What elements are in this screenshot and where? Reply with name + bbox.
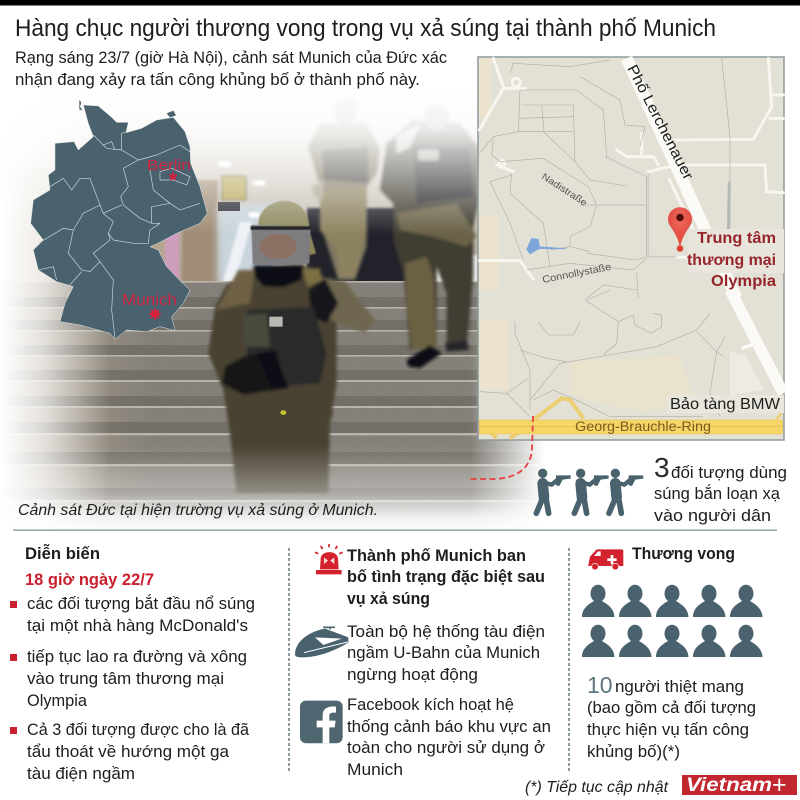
gunmen text: đối tượng dùng — [671, 463, 787, 482]
logo: Vietnam+ — [682, 771, 797, 799]
text: facebook: thống cảnh báo khu vực an — [347, 717, 551, 736]
pillar and corridor — [182, 180, 218, 286]
map lines upper — [479, 58, 783, 298]
icon: siren — [315, 544, 343, 574]
map of Germany — [31, 100, 207, 339]
icon: Berlin star — [168, 171, 178, 181]
text: U-Bahn — [347, 622, 545, 684]
callout: Olympia: Olympia — [711, 273, 776, 290]
text: death toll: thực hiện vụ tấn công — [587, 720, 749, 739]
gunmen text: vào người dân — [654, 506, 771, 525]
map street labels: Phố Lerchenauer — [623, 62, 697, 183]
icon: train — [295, 627, 348, 657]
gunmen text: súng bắn loạn xạ — [654, 484, 781, 503]
bullet one: các đối tượng bắt đầu nổ súng — [27, 594, 255, 613]
panel: state of emergency — [295, 544, 551, 779]
text: facebook: Munich — [347, 760, 403, 779]
icon: ambulance — [588, 549, 623, 570]
panel: street map: Nadistraße — [539, 171, 589, 209]
map landmark: BMW museum — [667, 395, 784, 413]
text: death toll — [587, 672, 756, 761]
heading: casualties: Thương vong — [632, 544, 735, 563]
map blocks — [479, 58, 765, 412]
callout: Olympia — [687, 229, 784, 290]
bullet one — [10, 594, 255, 635]
panel: timeline — [10, 544, 255, 783]
footnote: (*) Tiếp tục cập nhật — [525, 779, 669, 796]
foreground soldier — [208, 201, 375, 493]
icon: map pin — [668, 207, 692, 252]
bullet two: tiếp tục lao ra đường và xông — [27, 647, 247, 666]
label: Berlin: Berlin — [147, 157, 191, 174]
stair texture — [0, 282, 545, 532]
map lines lower — [479, 290, 783, 438]
logo: Vietnam+: + — [772, 771, 787, 799]
panel: street map — [478, 57, 784, 440]
bullet three — [10, 720, 250, 783]
text: death toll: người thiệt mang — [615, 677, 744, 696]
bullet two — [10, 647, 247, 710]
icons: ten victims — [582, 585, 762, 657]
bullet three: tàu điện ngầm — [27, 764, 135, 783]
arrow: red dashed connector — [468, 416, 533, 479]
date: 18 giờ ngày 22/7 — [25, 570, 154, 589]
text: facebook: Facebook kích hoạt hệ — [347, 695, 514, 714]
panel: street map: Georg-Brauchle-Ring — [575, 419, 711, 434]
heading: emergency: bố tình trạng đặc biệt sau — [347, 567, 545, 586]
text: death toll: khủng bố)(*) — [587, 742, 680, 761]
text: facebook — [347, 695, 551, 779]
intro text — [15, 48, 447, 89]
intro text: nhận đang xảy ra tấn công khủng bố ở thành phố này. — [15, 70, 420, 89]
heading: emergency: Thành phố Munich ban — [347, 546, 526, 565]
background soldier right — [380, 103, 478, 368]
bullet one: tại một nhà hàng McDonald's — [27, 616, 248, 635]
panel: street map: Bảo tàng BMW — [670, 396, 781, 413]
text: U-Bahn: Toàn bộ hệ thống tàu điện — [347, 622, 545, 641]
bullet three: Cả 3 đối tượng được cho là đã — [27, 720, 250, 739]
bullet three: tẩu thoát về hướng một ga — [27, 742, 230, 761]
title: Hàng chục người thương vong trong vụ xả súng tại thành phố Munich — [15, 15, 716, 42]
ceiling lights and sign — [218, 161, 232, 167]
divider — [13, 530, 777, 531]
text: facebook: toàn cho người sử dụng ở — [347, 738, 545, 757]
column separators — [289, 548, 569, 772]
panel: casualties — [582, 544, 762, 761]
top black bar — [0, 0, 800, 6]
photo caption: Cảnh sát Đức tại hiện trường vụ xả súng ở Munich. — [18, 502, 378, 519]
icon: facebook — [300, 701, 343, 743]
text: U-Bahn: ngầm U-Bahn của Munich — [347, 643, 540, 662]
text: death toll: (bao gồm cả đối tượng — [587, 698, 756, 717]
photo: police on stairs — [0, 85, 565, 535]
intro text: Rạng sáng 23/7 (giờ Hà Nội), cảnh sát Munich của Đức xác — [15, 48, 447, 67]
heading: emergency — [347, 546, 545, 608]
callout: Olympia: Trung tâm — [697, 230, 776, 247]
text: U-Bahn: ngừng hoạt động — [347, 665, 478, 684]
heading: emergency: vụ xả súng — [347, 589, 430, 608]
gunmen text: 3 — [654, 452, 670, 483]
text: death toll: 10 — [587, 672, 613, 698]
callout: Olympia: thương mại — [687, 252, 776, 269]
bullet two: vào trung tâm thương mại — [27, 669, 224, 688]
logo: Vietnam+: Vietnam — [686, 775, 772, 796]
left wall — [0, 160, 110, 300]
stairs — [0, 282, 545, 532]
photo fades — [0, 85, 480, 235]
icon: Munich burst — [149, 308, 161, 320]
panel: street map: Connollystaße — [541, 262, 613, 286]
dark doorway — [307, 208, 407, 286]
gunmen text — [654, 452, 787, 525]
heading: timeline: Diễn biến — [25, 544, 100, 563]
label: Munich: Munich — [122, 292, 177, 309]
background soldier left — [308, 95, 380, 280]
bullet two: Olympia — [27, 691, 88, 710]
icon: three gunmen — [536, 469, 643, 513]
